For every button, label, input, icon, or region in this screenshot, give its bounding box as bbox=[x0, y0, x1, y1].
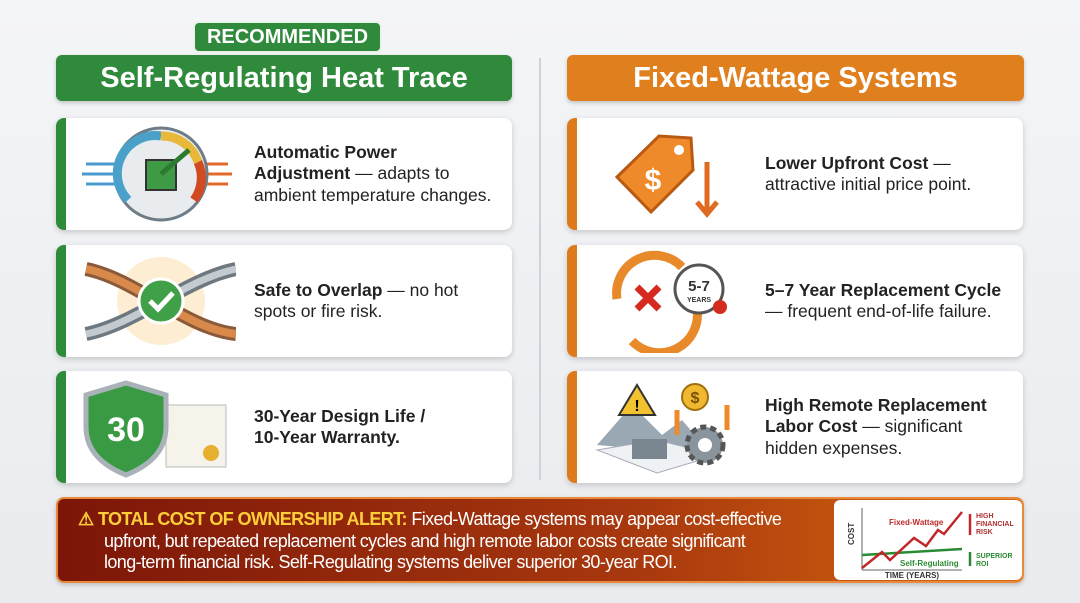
icon: cycle with timer: 5-7 bbox=[688, 278, 710, 295]
icon: cycle with timer bbox=[612, 250, 727, 353]
chart: cost over time: FINANCIAL bbox=[976, 521, 1014, 528]
icon: price tag: $ bbox=[645, 164, 662, 197]
chart: cost over time: HIGH bbox=[976, 513, 994, 520]
card: automatic power bbox=[56, 118, 512, 230]
icon: cycle with timer: YEARS bbox=[687, 297, 711, 304]
chart: cost over time: COST bbox=[847, 523, 856, 545]
card: safe to overlap bbox=[56, 245, 512, 357]
text: High Remote Replacement bbox=[765, 395, 987, 415]
chart: cost over time: TIME (YEARS) bbox=[885, 571, 939, 580]
alert text: long-term financial risk. Self-Regulating systems deliver superior 30-year ROI. bbox=[104, 552, 677, 572]
chart: cost over time: ROI bbox=[976, 561, 988, 568]
text: — frequent end-of-life failure. bbox=[765, 301, 992, 321]
card: 30-year bbox=[56, 371, 512, 483]
text: Automatic Power bbox=[254, 142, 397, 162]
icon: remote site gear: $ bbox=[691, 390, 700, 407]
icon: shield 30: 30 bbox=[107, 411, 145, 449]
chart: cost over time bbox=[834, 500, 1022, 580]
recommended tag: RECOMMENDED bbox=[207, 26, 368, 48]
text: ambient temperature changes. bbox=[254, 185, 491, 205]
chart: cost over time: Self-Regulating bbox=[900, 559, 959, 568]
text: Safe to Overlap — no hot bbox=[254, 280, 458, 300]
icon: remote site gear bbox=[595, 383, 730, 474]
alert text: ⚠ TOTAL COST OF OWNERSHIP ALERT: Fixed-Wattage systems may appear cost-effective bbox=[78, 509, 781, 529]
text: Adjustment — adapts to bbox=[254, 163, 449, 183]
header: fixed wattage bbox=[567, 55, 1024, 101]
alert text: upfront, but repeated replacement cycles and high remote labor costs create significant bbox=[104, 530, 745, 550]
chart: cost over time: Fixed-Wattage bbox=[889, 518, 944, 527]
text bbox=[765, 395, 987, 458]
header: self-regulating: Self-Regulating Heat Trace bbox=[100, 62, 468, 94]
text: 10-Year Warranty. bbox=[254, 427, 400, 447]
card: remote labor bbox=[567, 371, 1023, 483]
chart: cost over time: RISK bbox=[976, 529, 993, 536]
text bbox=[765, 152, 971, 194]
text: 5–7 Year Replacement Cycle bbox=[765, 280, 1001, 300]
chart: cost over time: SUPERIOR bbox=[976, 553, 1013, 560]
text: spots or fire risk. bbox=[254, 301, 382, 321]
card: replacement cycle bbox=[567, 245, 1023, 357]
icon: shield 30 bbox=[84, 380, 226, 478]
recommended tag bbox=[193, 21, 382, 53]
text bbox=[254, 142, 491, 205]
card: lower upfront bbox=[567, 118, 1023, 230]
header: fixed wattage: Fixed-Wattage Systems bbox=[633, 62, 958, 94]
icon: remote site gear: ! bbox=[634, 398, 640, 415]
text: 30-Year Design Life / bbox=[254, 406, 425, 426]
text: Labor Cost — significant bbox=[765, 416, 962, 436]
icon: crossing cables check bbox=[84, 257, 236, 345]
text bbox=[254, 280, 458, 321]
text: attractive initial price point. bbox=[765, 174, 971, 194]
header: self-regulating bbox=[56, 55, 512, 101]
divider bbox=[539, 58, 541, 480]
alert panel bbox=[56, 497, 1024, 583]
icon: price tag bbox=[615, 134, 719, 218]
text bbox=[254, 406, 426, 447]
text: hidden expenses. bbox=[765, 438, 902, 458]
text: Lower Upfront Cost — bbox=[765, 152, 951, 172]
icon: gauge bbox=[82, 126, 232, 222]
text bbox=[765, 280, 1001, 321]
alert text bbox=[78, 509, 782, 572]
